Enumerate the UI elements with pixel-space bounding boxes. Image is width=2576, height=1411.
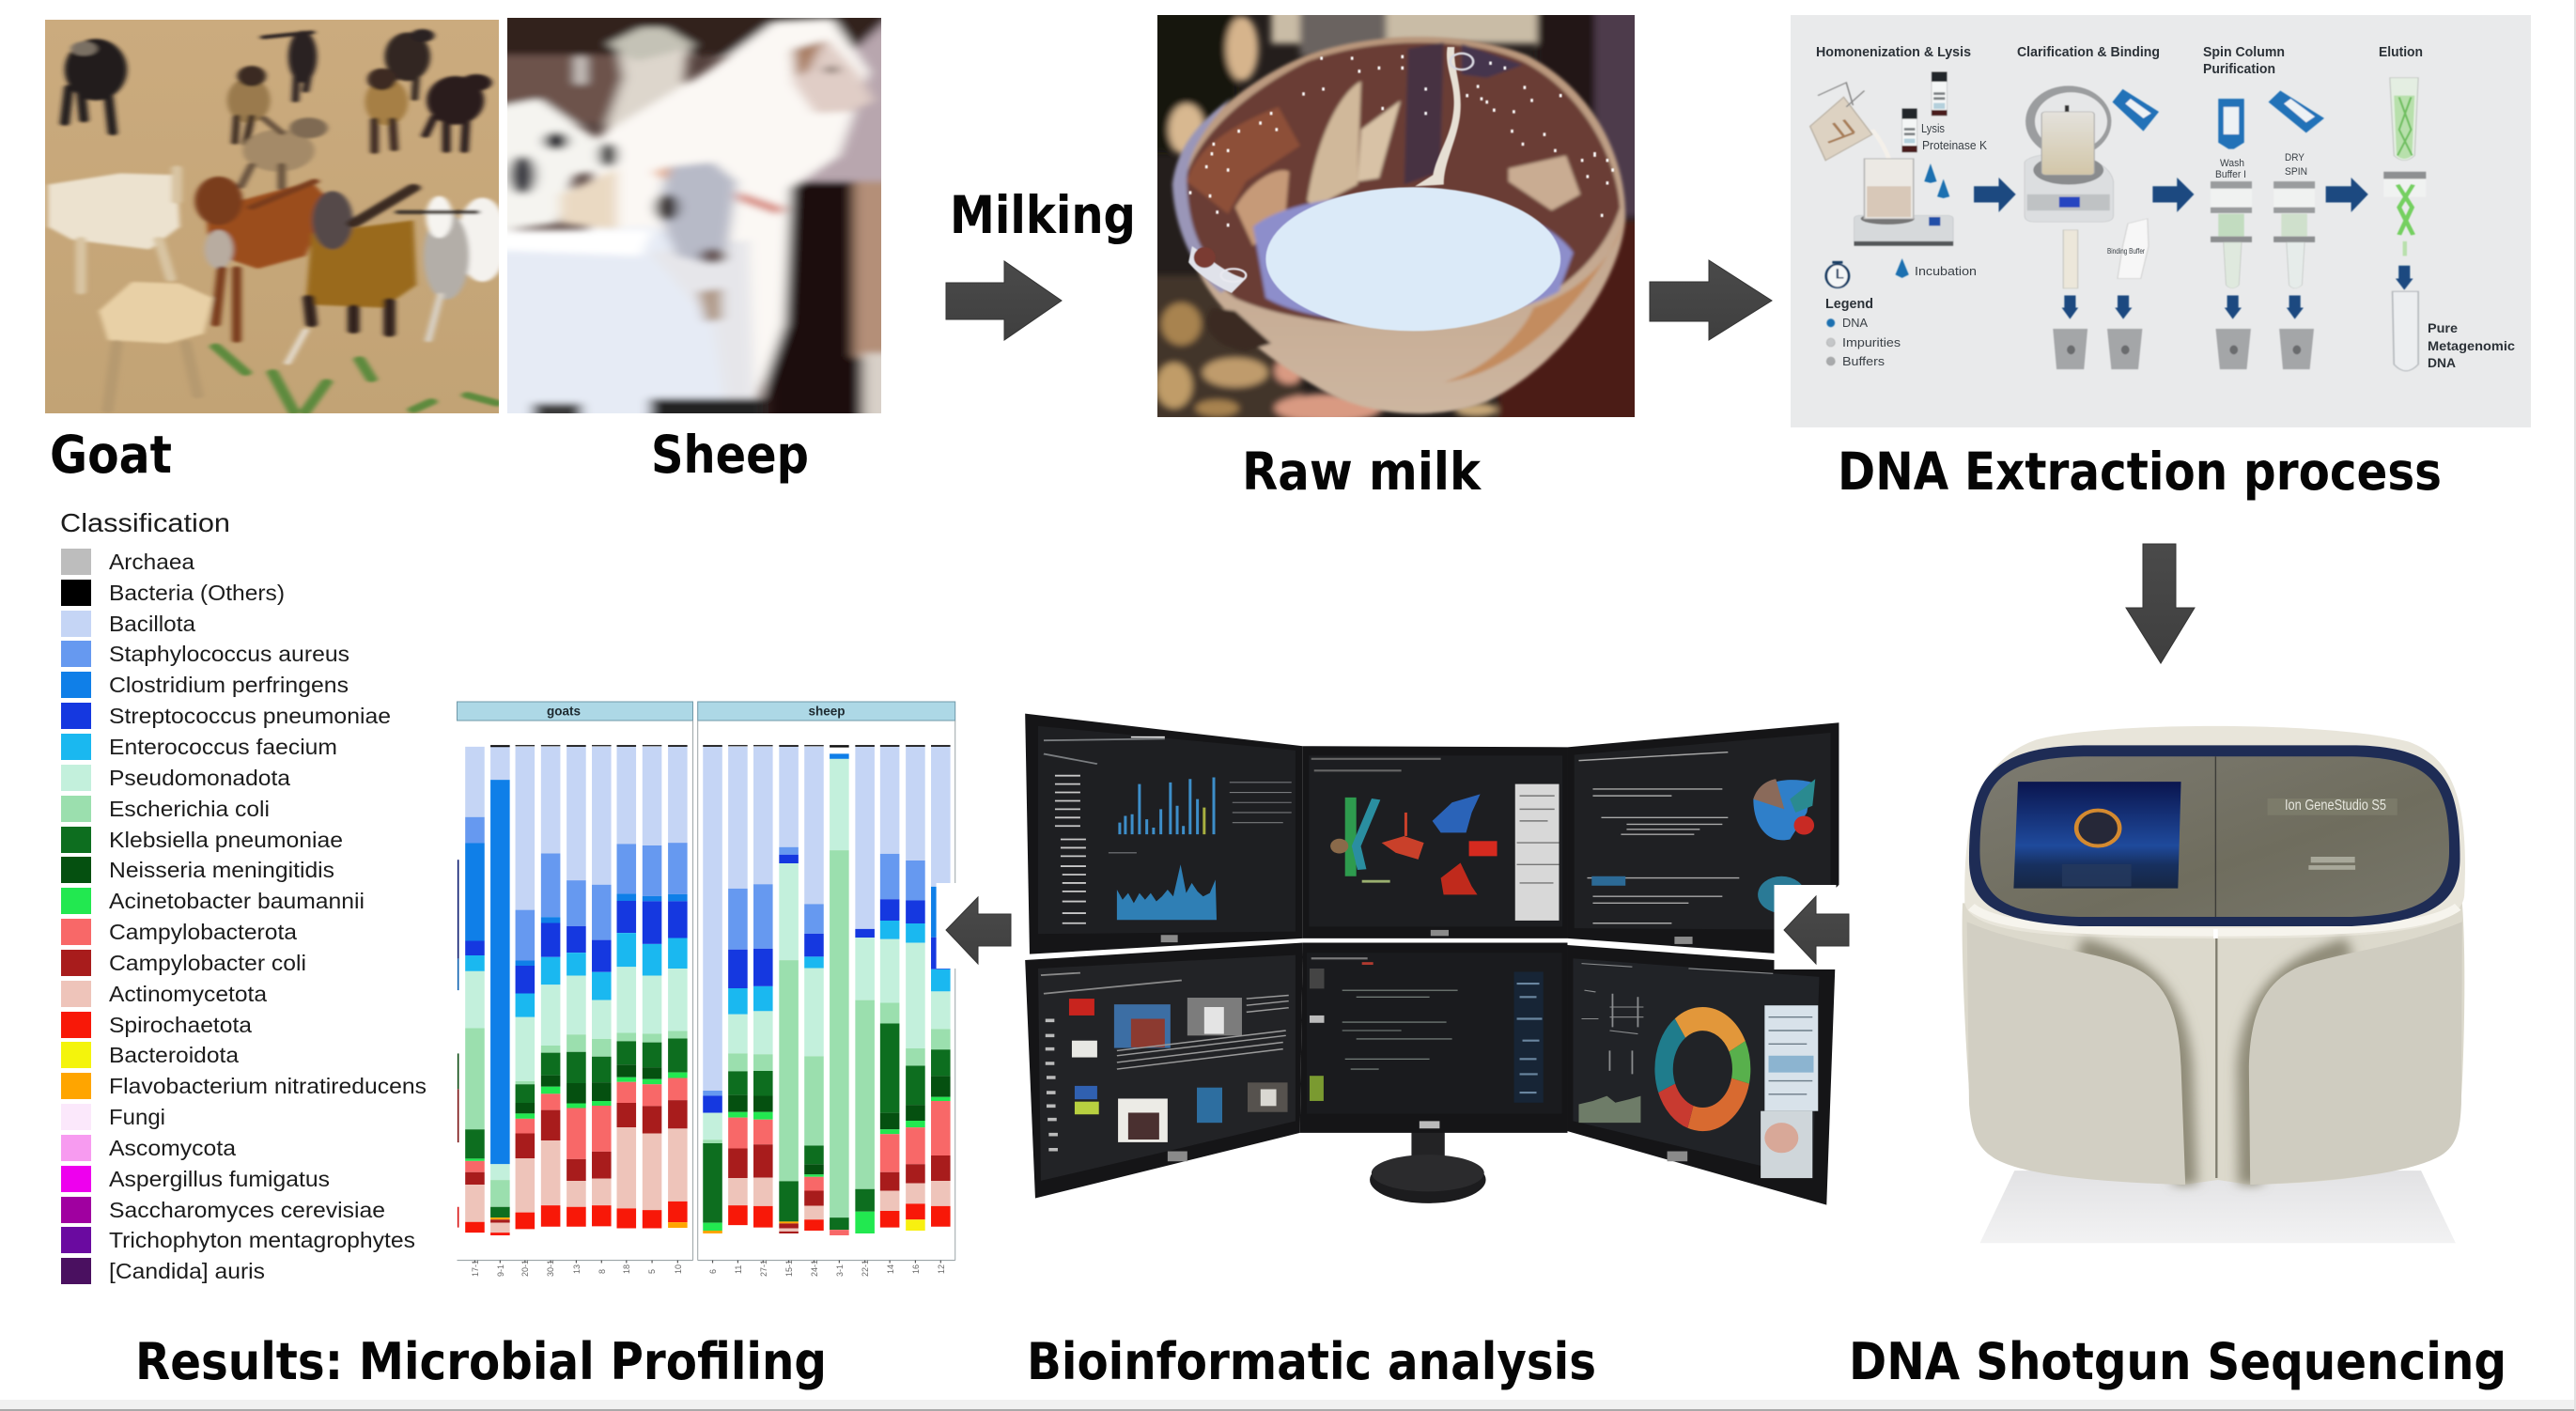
label: Bioinformatic analysis: Bioinformatic analysis [1027, 1332, 1596, 1391]
step labels: Metagenomic [2428, 338, 2515, 353]
step labels: Incubation [1915, 264, 1977, 278]
sample axis labels: 15-1 [784, 1260, 794, 1277]
step labels: Legend [1825, 296, 1873, 312]
sample axis labels: 8 [597, 1269, 607, 1274]
legend names: [Candida] auris [109, 1259, 265, 1283]
facet header: sheep [698, 702, 955, 721]
step labels: DRY [2285, 152, 2305, 163]
arrow: sequencer to bioinformatic analysis [1784, 896, 1849, 964]
label: Milking: Milking [950, 185, 1136, 245]
arrow: raw milk to DNA extraction [1650, 260, 1772, 340]
sample axis labels: 20-1 [520, 1260, 530, 1277]
legend names: Streptococcus pneumoniae [109, 704, 391, 728]
sequencer illustration [1963, 726, 2465, 1243]
monitor bottom centre: code editor [1300, 942, 1567, 1133]
white cover behind arrow over last bar [937, 883, 957, 969]
legend names: Saccharomyces cerevisiae [109, 1198, 385, 1222]
sample axis labels: 10 [674, 1264, 683, 1274]
legend names: Aspergillus fumigatus [109, 1167, 330, 1191]
step labels: Buffer I [2215, 169, 2246, 180]
sample axis labels: 24-1 [810, 1260, 819, 1277]
step labels: Pure [2428, 320, 2458, 335]
legend names: Trichophyton mentagrophytes [109, 1228, 415, 1252]
step labels: Homonenization & Lysis [1816, 45, 1971, 60]
panel: DNA extraction process diagram [1791, 15, 2531, 427]
goats sample bars [474, 747, 677, 1235]
legend names: Bacteria (Others) [109, 581, 285, 605]
sample axis labels: 27-1 [759, 1260, 768, 1277]
sample axis labels: 17-1 [471, 1260, 480, 1277]
label: DNA Extraction process: DNA Extraction process [1838, 442, 2442, 502]
monitor bottom left: media dashboard [1025, 942, 1303, 1199]
panel: classification legend [60, 508, 427, 1284]
legend names: Fungi [109, 1105, 165, 1129]
arrow: goat and sheep to raw milk [946, 261, 1062, 340]
sample axis labels: 13 [572, 1264, 582, 1274]
arrow: bioinformatic analysis to results [946, 897, 1011, 964]
sample axis labels: 22-1 [861, 1260, 870, 1277]
label: Raw milk: Raw milk [1242, 442, 1482, 502]
legend names: Clostridium perfringens [109, 673, 349, 697]
legend names: Escherichia coli [109, 797, 270, 821]
monitor bottom right: donut chart dashboard [1567, 945, 1835, 1205]
legend names: Enterococcus faecium [109, 735, 337, 759]
photo: sheep [507, 18, 881, 413]
legend names [109, 550, 427, 1283]
donut chart [1664, 1019, 1742, 1120]
panel background [1791, 15, 2531, 427]
legend names: Acinetobacter baumannii [109, 889, 365, 913]
instrument: Ion GeneStudio S5 sequencer [1963, 726, 2465, 1243]
sample axis labels: 14 [886, 1264, 895, 1274]
label: DNA Shotgun Sequencing: DNA Shotgun Sequencing [1849, 1332, 2506, 1391]
legend names: Bacteroidota [109, 1043, 239, 1067]
step labels: Buffers [1842, 354, 1885, 368]
facet header: goats: goats [547, 705, 581, 718]
step labels: Lysis [1921, 121, 1945, 135]
legend names: Pseudomonadota [109, 766, 290, 790]
step labels: Impurities [1842, 335, 1901, 349]
photo: goats [45, 20, 507, 413]
sample axis labels: 5 [647, 1269, 657, 1274]
photo: raw milk in bowl [1157, 15, 1635, 417]
sample axis labels: 18 [622, 1264, 631, 1274]
legend names: Bacillota [109, 612, 195, 636]
sample axis labels: 30-1 [546, 1260, 555, 1277]
step labels: SPIN [2285, 166, 2307, 178]
legend names: Ascomycota [109, 1136, 236, 1160]
legend names: Spirochaetota [109, 1013, 252, 1037]
sample axis labels: 11 [734, 1265, 743, 1274]
sample axis labels [471, 1260, 946, 1277]
facet header: goats [457, 702, 693, 721]
sample axis labels: 3-1 [835, 1264, 845, 1277]
sample axis labels: 16 [911, 1264, 921, 1274]
legend swatches [61, 549, 91, 1284]
legend names: Archaea [109, 550, 194, 574]
step labels: Purification [2203, 62, 2275, 77]
legend title: Classification [60, 508, 230, 537]
sample axis labels: 6 [708, 1269, 718, 1274]
monitor top right: code and chart [1567, 722, 1839, 954]
extraction illustrations [1810, 72, 2426, 371]
label: Goat: Goat [50, 425, 172, 485]
step labels: Spin Column [2203, 45, 2285, 60]
step labels: Clarification & Binding [2017, 45, 2160, 60]
step labels [1816, 45, 2515, 370]
facet header: sheep: sheep [808, 705, 846, 718]
stacked bars [457, 721, 955, 1264]
step labels: Binding Buffer [2107, 247, 2145, 256]
instrument name: Ion GeneStudio S5 [2285, 798, 2386, 814]
legend names: Flavobacterium nitratireducens [109, 1074, 427, 1098]
sheep sample bars [713, 747, 940, 1235]
legend names: Neisseria meningitidis [109, 858, 334, 882]
legend names: Actinomycetota [109, 982, 267, 1006]
monitors: six-screen bioinformatics workstation [1025, 714, 1839, 1205]
arrow: DNA extraction down to sequencer [2126, 544, 2195, 663]
sample axis labels: 12 [937, 1264, 946, 1274]
legend names: Campylobacterota [109, 920, 297, 944]
white cover behind arrow over monitors [1774, 885, 1836, 969]
legend names: Staphylococcus aureus [109, 642, 349, 666]
stand [1370, 1128, 1486, 1203]
chart: stacked microbial composition bars, goats and sheep [457, 702, 955, 1277]
step labels: Elution [2379, 45, 2423, 60]
sample axis labels: 9-1 [496, 1264, 505, 1277]
monitor top centre: 3D structures [1303, 746, 1567, 938]
label: Sheep: Sheep [651, 425, 809, 485]
legend names: Campylobacter coli [109, 951, 306, 975]
monitor top left: bar charts [1025, 714, 1303, 954]
step labels: DNA [1842, 316, 1868, 330]
step labels: DNA [2428, 355, 2456, 370]
step labels: Proteinase K [1922, 138, 1987, 152]
step labels: Wash [2220, 158, 2244, 169]
label: Results: Microbial Profiling: Results: Microbial Profiling [135, 1332, 827, 1391]
legend names: Klebsiella pneumoniae [109, 828, 343, 852]
